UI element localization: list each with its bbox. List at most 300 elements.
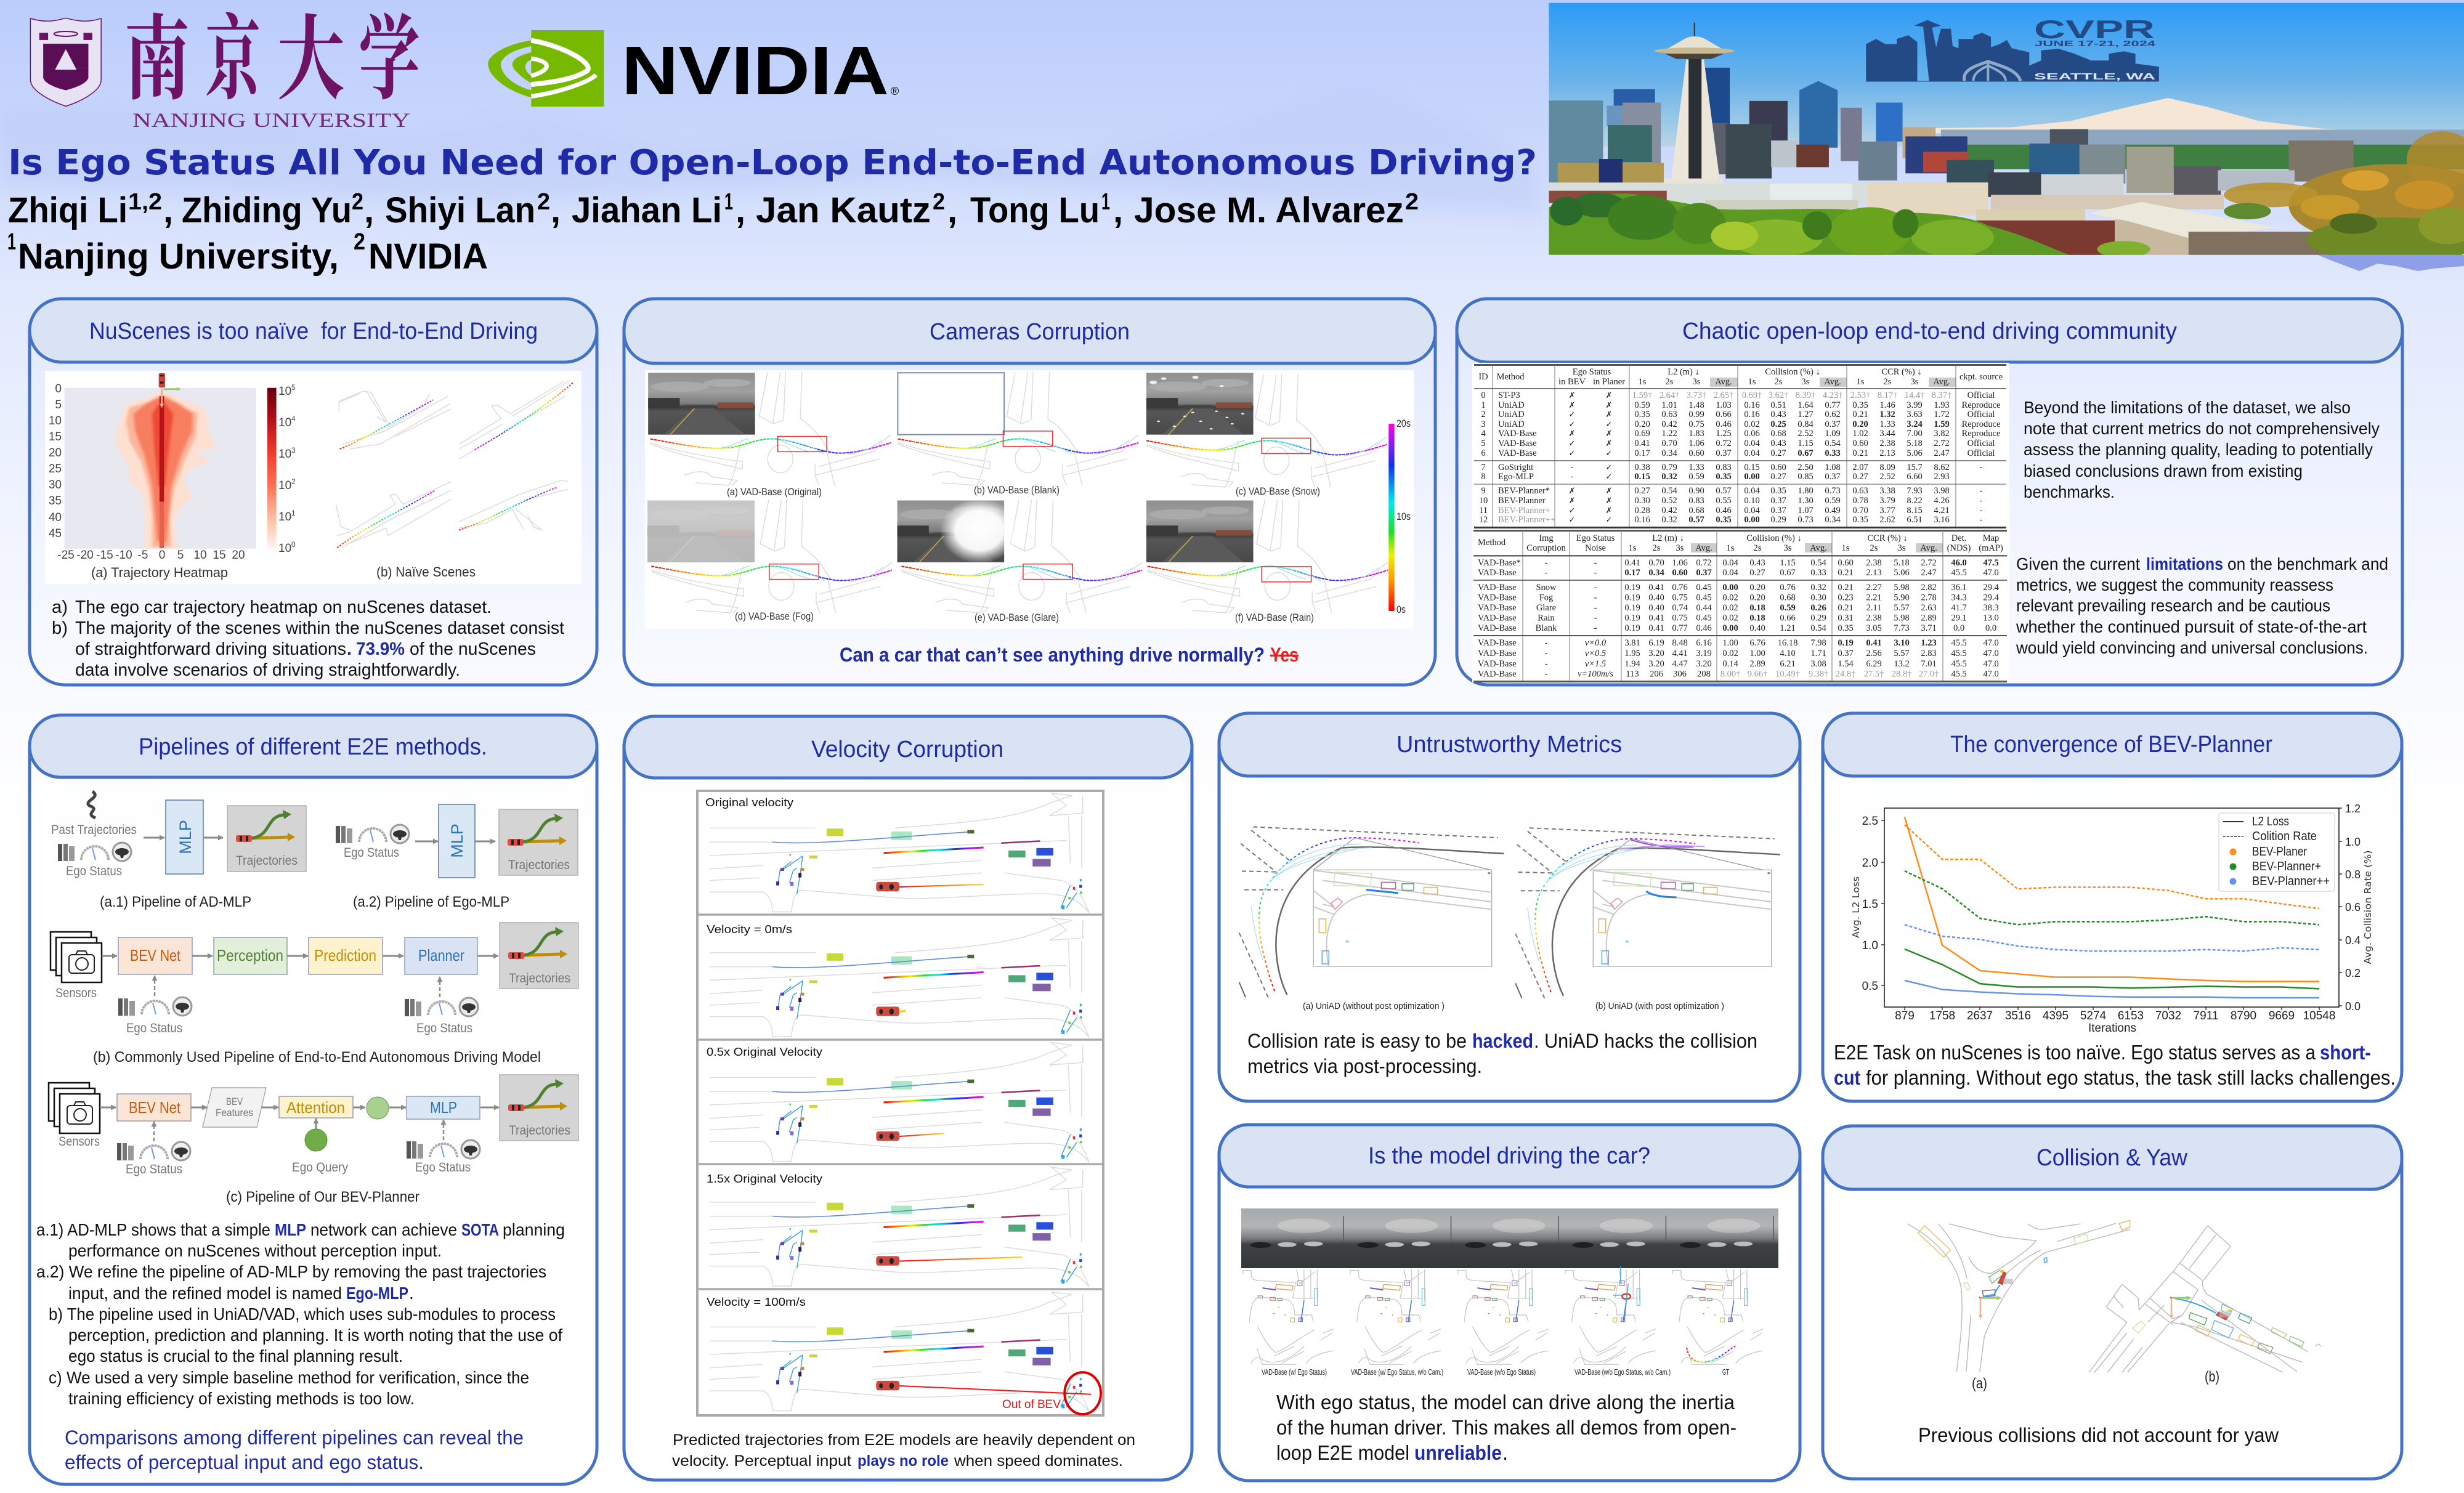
text block: limits of metrics: Beyond the limitations of the dataset, we also: [2024, 398, 2351, 417]
chart legend: BEV-Planer: [2252, 845, 2307, 859]
table: open-loop results: Official: [1968, 390, 1995, 400]
table: open-loop results: 0.15: [1634, 472, 1650, 482]
table: corruption results: 206: [1650, 669, 1663, 679]
table: open-loop results: 0.35: [1852, 515, 1868, 525]
table: open-loop results: Official: [1968, 448, 1995, 458]
table: open-loop results: 0.02: [1744, 419, 1760, 429]
diagram: Ego-MLP pipeline: [336, 804, 578, 878]
table: corruption results: 0.44: [1696, 603, 1712, 613]
table: open-loop results: ✗: [1606, 391, 1612, 400]
table: corruption results: 5.18: [1894, 558, 1910, 568]
text block: unreliable demos: loop E2E model: [1276, 1441, 1409, 1464]
table: open-loop results: 0.60: [1852, 439, 1868, 448]
table: corruption results: 0.41: [1624, 558, 1640, 568]
table: open-loop results: 0.10: [1744, 496, 1760, 506]
table: corruption results: 27.0†: [1919, 669, 1939, 679]
table: open-loop results: -: [1980, 496, 1983, 506]
affiliations: 2: [354, 229, 365, 255]
text block: limits of metrics: biased conclusions drawn from existing: [2024, 461, 2303, 480]
table: corruption results: 3.20: [1696, 659, 1712, 669]
text block: community suggestion: relevant prevailing research and be cautious: [2016, 596, 2330, 615]
text block: short-cut takeaway: [1834, 1041, 2396, 1089]
panel: Velocity Corruption: [624, 716, 1192, 1480]
table: corruption results: (mAP): [1979, 543, 2003, 553]
panel: Untrustworthy Metrics: [1219, 713, 1800, 1101]
table: corruption results: 0.30: [1810, 593, 1826, 602]
table: open-loop results: 4.26: [1934, 496, 1950, 506]
table: open-loop results: ✓: [1569, 516, 1575, 525]
table: open-loop results: 0.20: [1852, 419, 1868, 429]
table: corruption results: 2.38: [1866, 613, 1882, 623]
chart: velocity scenes: [697, 791, 1103, 1415]
table: open-loop results: 0.35: [1634, 410, 1650, 419]
panel: Is the model driving the car: [1219, 1125, 1800, 1481]
chart: convergence lines: 8790: [2231, 1009, 2256, 1022]
table: corruption results: VAD-Base: [1478, 649, 1517, 658]
figure: demo comparison strip: [1241, 1208, 1778, 1377]
table: open-loop results: 1.83: [1688, 429, 1704, 439]
text block: velocity takeaway: Predicted trajectories from E2E models are heavily dependent on: [673, 1431, 1135, 1449]
table: open-loop results: Collision (%) ↓: [1765, 367, 1820, 377]
table: corruption results: 5.98: [1894, 613, 1910, 623]
table: corruption results: 8.48: [1672, 638, 1688, 648]
table: open-loop results: 1.33: [1879, 419, 1895, 429]
table: open-loop results: Ego Status: [1573, 367, 1611, 377]
table: open-loop results: ✓: [1606, 463, 1612, 472]
photo: Seattle skyline with CVPR logo: [1549, 3, 2464, 262]
table: corruption results: 1.00: [1722, 638, 1738, 648]
table: open-loop results: ✗: [1606, 410, 1612, 419]
table: corruption results: 0.59: [1780, 603, 1796, 613]
table: corruption results: -: [1594, 593, 1597, 602]
table: corruption results: -: [1594, 613, 1597, 623]
table: corruption results: 47.0: [1983, 659, 1999, 669]
table: open-loop results: Method: [1496, 372, 1525, 382]
text block: hacked collision rate: hacked: [1472, 1030, 1533, 1052]
table: open-loop results: GoStright: [1498, 463, 1533, 472]
table: corruption results: 0.27: [1749, 568, 1765, 578]
table: corruption results: Rain: [1538, 613, 1555, 623]
text block: community suggestion: on the benchmark and: [2227, 554, 2388, 573]
table: open-loop results: 1.48: [1688, 400, 1704, 410]
table: corruption results: 0.40: [1749, 623, 1765, 633]
table: corruption results: 6.16: [1696, 638, 1712, 648]
table: corruption results: 0.41: [1866, 638, 1882, 648]
table: corruption results: 0.46: [1696, 623, 1712, 633]
table: corruption results: -: [1545, 659, 1548, 669]
table: open-loop results: 1.22: [1661, 429, 1677, 439]
table: corruption results: 6.76: [1749, 638, 1765, 648]
table: open-loop results: 0.25: [1770, 419, 1786, 429]
table: corruption results: 0.19: [1624, 613, 1640, 623]
authors: 2: [352, 189, 363, 215]
table: open-loop results: 1.25: [1716, 429, 1732, 439]
table: open-loop results: 4.21: [1934, 506, 1950, 516]
panel: Collision and Yaw: [1823, 1126, 2402, 1479]
table: open-loop results: 3.62†: [1769, 390, 1788, 400]
caption b: (b) Commonly Used Pipeline of End-to-End Autonomous Driving Model: [93, 1049, 541, 1066]
table: open-loop results: 5: [1481, 439, 1486, 448]
table: corruption results: 2.13: [1866, 568, 1882, 578]
table: open-loop results: 0.59: [1688, 472, 1704, 482]
table: corruption results: 0.26: [1810, 603, 1826, 613]
table: open-loop results: Official: [1968, 410, 1995, 419]
chart: trajectory heatmap: (a) Trajectory Heatmap: [91, 565, 228, 580]
table: corruption results: 16.18: [1778, 638, 1797, 648]
diagram: Ego-MLP pipeline: MLP: [448, 823, 466, 858]
table: open-loop results: 0.16: [1744, 400, 1760, 410]
table: open-loop results: 0.79: [1661, 463, 1677, 472]
chart: trajectory heatmap: 5: [55, 399, 62, 411]
chart: velocity scenes: 1.5x Original Velocity: [707, 1173, 822, 1185]
authors: Zhiding Yu: [182, 190, 352, 230]
table: corruption results: Blank: [1536, 623, 1557, 633]
text block: short-cut takeaway: cut: [1834, 1066, 1860, 1089]
heading: [624, 716, 1192, 778]
table: open-loop results: 0.72: [1716, 439, 1732, 448]
chart: trajectory heatmap: 0: [55, 382, 62, 395]
table: open-loop results: 0.62: [1825, 410, 1841, 419]
chart: convergence lines: [1850, 803, 2373, 1035]
table: corruption results: Fog: [1539, 593, 1553, 602]
table: open-loop results: 0.04: [1744, 439, 1760, 448]
table: open-loop results: 2.62: [1879, 515, 1895, 525]
table: open-loop results: ckpt. source: [1959, 372, 2003, 382]
chart legend: BEV-Planner+: [2252, 860, 2321, 873]
table: corruption results: 24.8†: [1836, 669, 1855, 679]
heading: NuScenes is too naïve for End-to-End Driving: [89, 318, 538, 344]
authors: 1: [1101, 189, 1110, 215]
table: open-loop results: 14.4†: [1905, 390, 1924, 400]
table: corruption results: 0.19: [1624, 583, 1640, 593]
table: corruption results: 7.98: [1810, 638, 1826, 648]
figure: yaw collision scenes: (b): [2205, 1369, 2219, 1385]
table: corruption results: 45.5: [1951, 638, 1967, 648]
table: open-loop results: 1.01: [1661, 400, 1677, 410]
table: open-loop results: 0: [1481, 390, 1486, 400]
table: corruption results: 2.21: [1866, 593, 1882, 602]
table: corruption results: -: [1545, 669, 1548, 679]
table: corruption results: 0.18: [1749, 603, 1765, 613]
table: open-loop results: -: [1980, 486, 1983, 496]
table: open-loop results: 2.53†: [1850, 390, 1870, 400]
captions a.1 and a.2: (a.1) Pipeline of AD-MLP: [100, 894, 251, 910]
table: open-loop results: 0.46: [1716, 506, 1732, 516]
table: open-loop results: 1.08: [1825, 463, 1841, 472]
chart: UniAD without and with post optimization: [1239, 827, 1780, 1011]
table: corruption results: 0.20: [1749, 593, 1765, 602]
table: open-loop results: 0.27: [1852, 472, 1868, 482]
heading: The convergence of BEV-Planner: [1950, 732, 2272, 758]
table: open-loop results: ✗: [1569, 496, 1575, 506]
table: open-loop results: -: [1571, 472, 1574, 482]
table: corruption results: 0.32: [1810, 583, 1826, 593]
chart: convergence lines: 2.5: [1862, 815, 1878, 828]
table: corruption results: 0.19: [1624, 623, 1640, 633]
table: open-loop results: 8.17†: [1878, 390, 1897, 400]
text block: community suggestion: Given the current: [2016, 554, 2140, 573]
table: corruption results: 2.82: [1921, 583, 1937, 593]
table: corruption results: -: [1594, 583, 1597, 593]
table: corruption results: 6.21: [1780, 659, 1796, 669]
table: corruption results: -: [1545, 638, 1548, 648]
table: open-loop results: 0.46: [1716, 419, 1732, 429]
text block: community suggestion: metrics, we suggest the community reassess: [2016, 575, 2333, 594]
chart: trajectory heatmap: 0: [159, 549, 165, 562]
table: corruption results: 45.5: [1951, 669, 1967, 679]
table: open-loop results: 0.57: [1688, 515, 1704, 525]
table: open-loop results: 0.59: [1634, 400, 1650, 410]
text block: dataset notes: b): [52, 618, 68, 638]
table: corruption results: 0.66: [1780, 613, 1796, 623]
table: corruption results: 6.29: [1866, 659, 1882, 669]
figure panel background: [45, 371, 582, 584]
ink wash blot: [2318, 255, 2464, 271]
table: open-loop results: 3.24: [1907, 419, 1923, 429]
table: corruption results: 0.19: [1624, 593, 1640, 602]
table: corruption results: -: [1594, 558, 1597, 568]
table: corruption results: VAD-Base: [1478, 613, 1517, 623]
table: open-loop results: BEV-Planner: [1498, 496, 1546, 506]
table: open-loop results: 0.84: [1797, 419, 1814, 429]
chart: convergence lines: 6153: [2118, 1009, 2144, 1022]
figure: demo comparison strip: VAD-Base (w/o Ego Status): [1467, 1367, 1536, 1377]
chart: trajectory heatmap: -25: [57, 549, 75, 562]
table: corruption results: 1.95: [1624, 649, 1640, 658]
table: open-loop results: 1s: [1639, 377, 1647, 387]
table: corruption results: 0.45: [1696, 583, 1712, 593]
chart: corrupted camera plots: (d) VAD-Base (Fog): [735, 611, 814, 622]
table: corruption results: Avg.: [1695, 543, 1712, 553]
table: corruption results: 0.21: [1838, 568, 1854, 578]
captions a.1 and a.2: (a.2) Pipeline of Ego-MLP: [353, 894, 509, 910]
chart: convergence lines: 2637: [1967, 1009, 1993, 1022]
table: open-loop results: 0.37: [1825, 472, 1841, 482]
chart: trajectory heatmap: 30: [49, 479, 62, 492]
text block: limits of metrics: note that current metrics do not comprehensively: [2024, 419, 2380, 438]
chart: convergence lines: 1.0: [1862, 939, 1878, 952]
table: corruption results: 2.63: [1921, 603, 1937, 613]
table: corruption results: 3.05: [1866, 623, 1882, 633]
text block: dataset notes: .: [347, 639, 352, 659]
table: corruption results: 47.0: [1983, 669, 1999, 679]
table: open-loop results: 0.29: [1770, 515, 1786, 525]
table: open-loop results: 1s: [1857, 377, 1865, 387]
table: corruption results: 0.0: [1953, 623, 1964, 633]
table: open-loop results: 0.55: [1716, 496, 1732, 506]
table: corruption results: 0.31: [1838, 613, 1854, 623]
table: open-loop results: Avg.: [1933, 377, 1950, 387]
diagram: BEV-Planner pipeline: BEV Net: [129, 1098, 181, 1117]
table: open-loop results: Avg.: [1715, 377, 1732, 387]
table: open-loop results: 11: [1479, 506, 1488, 516]
table: corruption results: Corruption: [1526, 543, 1566, 553]
table: corruption results: 10.49†: [1775, 669, 1800, 679]
table: open-loop results: 15.7: [1907, 463, 1923, 472]
diagram: AD-MLP pipeline: Trajectories: [236, 854, 298, 868]
heading: [1219, 1125, 1800, 1187]
table: corruption results: 0.54: [1810, 558, 1826, 568]
text block: yaw note: Previous collisions did not account for yaw: [1918, 1424, 2279, 1446]
text block: pipeline notes: planning: [503, 1220, 565, 1239]
table: open-loop results: 0.33: [1825, 448, 1841, 458]
panel: NuScenes is too naive: [30, 299, 597, 685]
table: corruption results: 0.54: [1810, 623, 1826, 633]
table: open-loop results: ✗: [1606, 496, 1612, 506]
authors: ,: [736, 190, 745, 230]
table: corruption results: 5.98: [1894, 583, 1910, 593]
text block: dataset notes: of the nuScenes: [410, 639, 536, 659]
table: open-loop results: 0.35: [1716, 515, 1732, 525]
table: corruption results: 3s: [1784, 543, 1792, 553]
text block: pipeline notes: [36, 1220, 565, 1408]
table: corruption results: 7.01: [1921, 659, 1937, 669]
text block: velocity takeaway: velocity. Perceptual input: [672, 1452, 851, 1470]
chart: trajectory heatmap: -5: [138, 549, 148, 562]
table: open-loop results: 5.18: [1907, 439, 1923, 448]
logo: NVIDIA: ®: [891, 85, 899, 97]
table: open-loop results: 0.51: [1770, 400, 1786, 410]
table: open-loop results: 1.72: [1934, 410, 1950, 419]
table: corruption results: VAD-Base*: [1478, 558, 1521, 568]
chart: convergence lines: Avg. Collision Rate (%): [2362, 850, 2373, 965]
table: corruption results: 0.17: [1624, 568, 1640, 578]
diagram: BEV-Planner pipeline: Attention: [286, 1098, 345, 1117]
table: corruption results: 2.27: [1866, 583, 1882, 593]
table: corruption results: 0.70: [1648, 558, 1664, 568]
table: open-loop results: 0.42: [1661, 419, 1677, 429]
table: corruption results: 29.4: [1983, 593, 1999, 602]
table: open-loop results: -: [1571, 463, 1574, 472]
table: open-loop results: 2.72: [1934, 439, 1950, 448]
table: corruption results: 2.38: [1866, 558, 1882, 568]
chart: convergence lines: 2.0: [1862, 857, 1878, 870]
table: corruption results: 0.74: [1672, 603, 1688, 613]
table: open-loop results: 0.32: [1661, 515, 1677, 525]
table: corruption results: 2.89: [1921, 613, 1937, 623]
table: corruption results: 3.20: [1648, 659, 1664, 669]
table: open-loop results: 8.15: [1907, 506, 1923, 516]
table: open-loop results: -: [1980, 506, 1983, 516]
table: open-loop results: 0.63: [1852, 486, 1868, 496]
figure: demo comparison strip: GT: [1722, 1367, 1729, 1377]
table: open-loop results: 0.59: [1825, 496, 1841, 506]
chart: convergence lines: Avg. L2 Loss: [1850, 876, 1862, 938]
diagram: common end-to-end pipeline: Sensors: [55, 986, 97, 1000]
table: open-loop results: BEV-Planner*: [1498, 486, 1550, 496]
table: corruption results: 47.0: [1983, 649, 1999, 658]
diagram: common end-to-end pipeline: Trajectories: [509, 971, 570, 985]
chart: convergence lines: 4395: [2043, 1009, 2069, 1022]
text block: pipeline notes: Ego-MLP: [346, 1284, 408, 1303]
chart: convergence lines: 5274: [2080, 1009, 2107, 1022]
table: corruption results: 2s: [1870, 543, 1878, 553]
table: open-loop results: in BEV: [1558, 377, 1586, 387]
table: open-loop results: ✓: [1606, 420, 1612, 429]
table: open-loop results: 0.34: [1661, 448, 1677, 458]
table: open-loop results: 0.04: [1744, 486, 1760, 496]
diagram: BEV-Planner pipeline: Sensors: [59, 1135, 100, 1149]
table: open-loop results: 0.77: [1825, 400, 1841, 410]
table: open-loop results: 0.57: [1716, 486, 1732, 496]
table: corruption results: 0.04: [1722, 568, 1738, 578]
authors: ,: [947, 190, 957, 230]
icon: Space Needle: [1655, 23, 1735, 184]
table: open-loop results: 0.21: [1852, 410, 1868, 419]
text block: community suggestion: would yield convincing and universal conclusions.: [2016, 638, 2368, 657]
authors: 2: [1405, 189, 1419, 215]
table: corruption results: 4.47: [1672, 659, 1688, 669]
chart: trajectory heatmap: 40: [49, 511, 62, 524]
table: open-loop results: 0.42: [1661, 506, 1677, 516]
table: open-loop results: 1: [1481, 400, 1486, 410]
text block: pipeline notes: perception, prediction and planning. It is worth noting that the use of: [68, 1325, 562, 1345]
table: open-loop results: 0.67: [1797, 448, 1814, 458]
table: open-loop results: 2.47: [1934, 448, 1950, 458]
table: open-loop results: ✓: [1606, 449, 1612, 458]
table: open-loop results: ID: [1478, 372, 1488, 382]
chart: naive scenes: (b) Naïve Scenes: [376, 564, 476, 580]
table: open-loop results: 0.06: [1744, 429, 1760, 439]
table: open-loop results: 0.00: [1744, 472, 1760, 482]
table background: [1472, 363, 2009, 682]
authors: ,: [163, 190, 173, 230]
diagram: BEV-Planner pipeline: BEV: [226, 1096, 243, 1107]
table: corruption results: 7.73: [1894, 623, 1910, 633]
table: corruption results: 113: [1626, 669, 1639, 679]
chart legend: [2219, 813, 2335, 891]
table: corruption results: 13.2: [1894, 659, 1910, 669]
chart: convergence lines: 0.5: [1862, 980, 1878, 993]
chart: convergence lines: 0.0: [2345, 1000, 2361, 1013]
table: corruption results: 38.3: [1983, 603, 1999, 613]
table: corruption results: 13.0: [1983, 613, 1999, 623]
table: corruption results: 0.41: [1648, 613, 1664, 623]
diagram: BEV-Planner pipeline: Ego Status: [415, 1160, 471, 1175]
table: open-loop results: 3.77: [1879, 506, 1895, 516]
text block: short-cut takeaway: for planning. Without ego status, the task still lacks challenges.: [1866, 1066, 2396, 1089]
table: corruption results: v=100m/s: [1578, 669, 1613, 679]
chart: trajectory heatmap: 5: [291, 383, 296, 392]
table: corruption results: 0.37: [1838, 649, 1854, 658]
chart: convergence lines: 9669: [2269, 1009, 2295, 1022]
text block: velocity takeaway: plays no role: [857, 1452, 949, 1470]
table: corruption results: VAD-Base: [1478, 638, 1517, 648]
chart: trajectory heatmap: 20: [49, 447, 62, 459]
table: open-loop results: 0.69: [1634, 429, 1650, 439]
authors: Jose M. Alvarez: [1134, 190, 1404, 230]
authors: Tong Lu: [970, 190, 1100, 230]
table: corruption results: 36.1: [1951, 583, 1967, 593]
chart: trajectory heatmap: 25: [49, 463, 62, 475]
table: open-loop results: 0.68: [1770, 429, 1786, 439]
table: open-loop results: ST-P3: [1498, 390, 1520, 400]
diagram: BEV-Planner pipeline: MLP: [430, 1098, 457, 1117]
table: open-loop results: 3: [1481, 419, 1486, 429]
table: corruption results: 2s: [1754, 543, 1762, 553]
table: open-loop results: 8.09: [1879, 463, 1895, 472]
text block: pipeline notes: SOTA: [461, 1220, 499, 1239]
table: corruption results: 3.20: [1648, 649, 1664, 658]
caption c: (c) Pipeline of Our BEV-Planner: [226, 1189, 419, 1205]
chart: corrupted camera plots: [647, 372, 1411, 623]
CVPR logo text: CVPR: [2034, 15, 2155, 44]
table: corruption results: 0.21: [1838, 583, 1854, 593]
table: corruption results: 0.41: [1648, 583, 1664, 593]
table: open-loop results: 1.80: [1797, 486, 1814, 496]
table: corruption results: 1.54: [1838, 659, 1854, 669]
table: corruption results: 6.19: [1648, 638, 1664, 648]
